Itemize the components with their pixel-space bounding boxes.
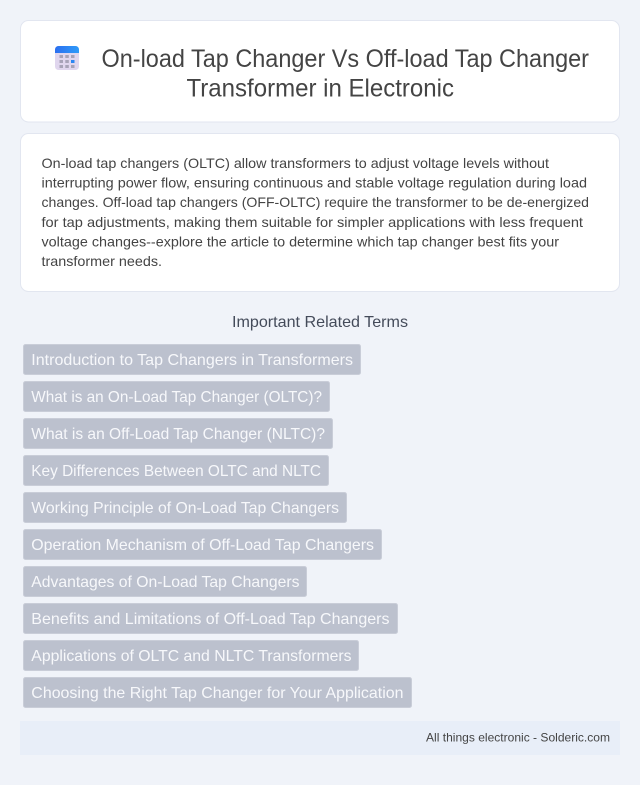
- text block: description: interrupting power flow, ensuring continuous and stable voltage regulation during load: [42, 175, 587, 191]
- term 2: [24, 382, 330, 412]
- list of related terms: [24, 344, 412, 708]
- term 10: [24, 678, 412, 708]
- term 5: [24, 492, 346, 522]
- term 6: Operation Mechanism of Off-Load Tap Changers: [31, 537, 374, 554]
- term 2: What is an On-Load Tap Changer (OLTC)?: [31, 389, 322, 406]
- title: [102, 45, 589, 102]
- term 8: [24, 604, 398, 634]
- heading: important related terms: Important Related Terms: [232, 314, 408, 331]
- title: On-load Tap Changer Vs Off-load Tap Changer: [102, 45, 589, 73]
- text block: description: voltage changes--explore the article to determine which tap changer best fits your: [42, 233, 559, 249]
- text block: description: transformer needs.: [42, 253, 162, 269]
- term 9: [24, 640, 358, 670]
- term 3: What is an Off-Load Tap Changer (NLTC)?: [31, 426, 325, 443]
- term 5: Working Principle of On-Load Tap Changers: [31, 500, 339, 517]
- footer: [20, 721, 620, 755]
- term 4: Key Differences Between OLTC and NLTC: [31, 463, 321, 480]
- term 1: [24, 344, 360, 374]
- text block: description: changes. Off-load tap changers (OFF-OLTC) require the transformer to be de-energized: [42, 194, 589, 210]
- title: Transformer in Electronic: [186, 74, 454, 102]
- panel: title card: [20, 20, 620, 122]
- term 7: [24, 566, 306, 596]
- term 10: Choosing the Right Tap Changer for Your Application: [31, 685, 404, 702]
- term 6: [24, 530, 382, 560]
- text block: description: [42, 155, 589, 269]
- term 8: Benefits and Limitations of Off-Load Tap Changers: [31, 611, 390, 628]
- footer: All things electronic - Solderic.com: [426, 730, 610, 744]
- term 1: Introduction to Tap Changers in Transformers: [31, 352, 353, 369]
- term 4: [24, 456, 328, 486]
- term 9: Applications of OLTC and NLTC Transformers: [31, 648, 352, 665]
- text block: description: for tap adjustments, making them suitable for simpler applications with less frequent: [42, 214, 583, 230]
- text block: description: On-load tap changers (OLTC) allow transformers to adjust voltage levels without: [42, 155, 549, 171]
- panel: description: [20, 134, 620, 292]
- term 3: [24, 418, 332, 448]
- term 7: Advantages of On-Load Tap Changers: [31, 574, 300, 591]
- icon: calendar: [55, 46, 79, 70]
